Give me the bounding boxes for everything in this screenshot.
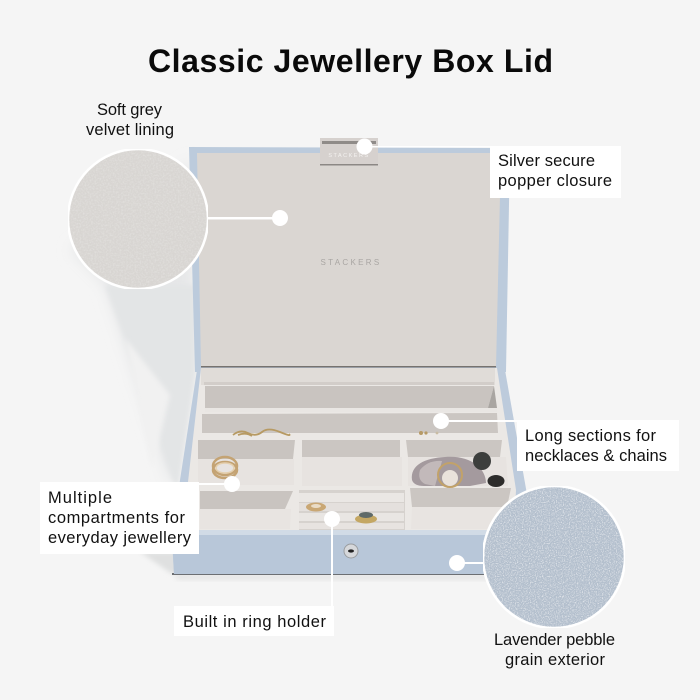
callout: popper closure: Silver secure [498, 152, 595, 170]
popper clasp: STACKERS [328, 153, 370, 159]
dot: long sections [433, 413, 449, 429]
dot: compartments [224, 476, 240, 492]
callout: long sections [433, 413, 679, 471]
callout: compartments: everyday jewellery [48, 529, 192, 547]
label: compartments [40, 482, 199, 554]
callout: compartments: compartments for [48, 509, 186, 527]
compartment: front left [200, 491, 293, 529]
earrings [419, 431, 438, 435]
label: pebble exterior: Lavender pebble [494, 631, 615, 649]
rings in holder [306, 502, 377, 524]
lid logo: STACKERS [321, 258, 381, 267]
base interior rim [186, 368, 516, 532]
popper clasp [320, 138, 378, 166]
necklace chain [233, 430, 290, 436]
hinge strip [201, 368, 495, 385]
callout: popper closure [356, 138, 621, 198]
press stud [344, 544, 358, 558]
callout: velvet lining [68, 101, 288, 289]
callout: ring holder: Built in ring holder [183, 613, 326, 631]
acrylic earrings [412, 457, 486, 487]
leader: pebble [457, 562, 485, 564]
label: long sections [517, 420, 679, 471]
dot: pebble [449, 555, 465, 571]
swatch: velvet [68, 149, 208, 289]
box shadow [70, 160, 516, 580]
gold ring [213, 457, 237, 478]
leader: popper [365, 146, 490, 148]
label: popper closure [490, 146, 621, 198]
callout: ring holder [174, 511, 340, 636]
callout: long sections: necklaces & chains [525, 447, 667, 465]
leader: velvet lining [205, 217, 280, 220]
compartment: back left [198, 440, 295, 485]
dot: popper [356, 138, 372, 154]
compartment: back right [406, 440, 508, 486]
label: ring holder [174, 606, 334, 636]
long section back [205, 386, 494, 408]
swatch: pebble [483, 486, 625, 628]
compartment: front right [410, 488, 511, 529]
label: pebble exterior: grain exterior [505, 651, 606, 669]
ring holder [299, 490, 405, 531]
dot: ring holder [324, 511, 340, 527]
callout: popper closure: popper closure [498, 172, 612, 190]
title: Classic Jewellery Box Lid [148, 43, 553, 79]
compartment: back centre [302, 440, 402, 486]
callout: compartments: Multiple [48, 489, 112, 507]
dot: velvet lining [272, 210, 288, 226]
lid velvet lining [197, 153, 501, 367]
leader: ring holder [331, 519, 333, 607]
lid exterior [189, 147, 510, 372]
callout: compartments [40, 476, 240, 554]
black stones [473, 452, 504, 487]
long section front [202, 413, 498, 433]
leader: long sections [441, 420, 518, 422]
callout: long sections: Long sections for [525, 427, 656, 445]
callout: pebble exterior [449, 486, 625, 669]
label: velvet lining: Soft grey [97, 101, 163, 119]
jewellery box [172, 138, 528, 575]
label: velvet lining: velvet lining [86, 121, 174, 139]
leader: compartments [199, 483, 232, 485]
base exterior [172, 370, 528, 574]
front wall [172, 534, 526, 574]
